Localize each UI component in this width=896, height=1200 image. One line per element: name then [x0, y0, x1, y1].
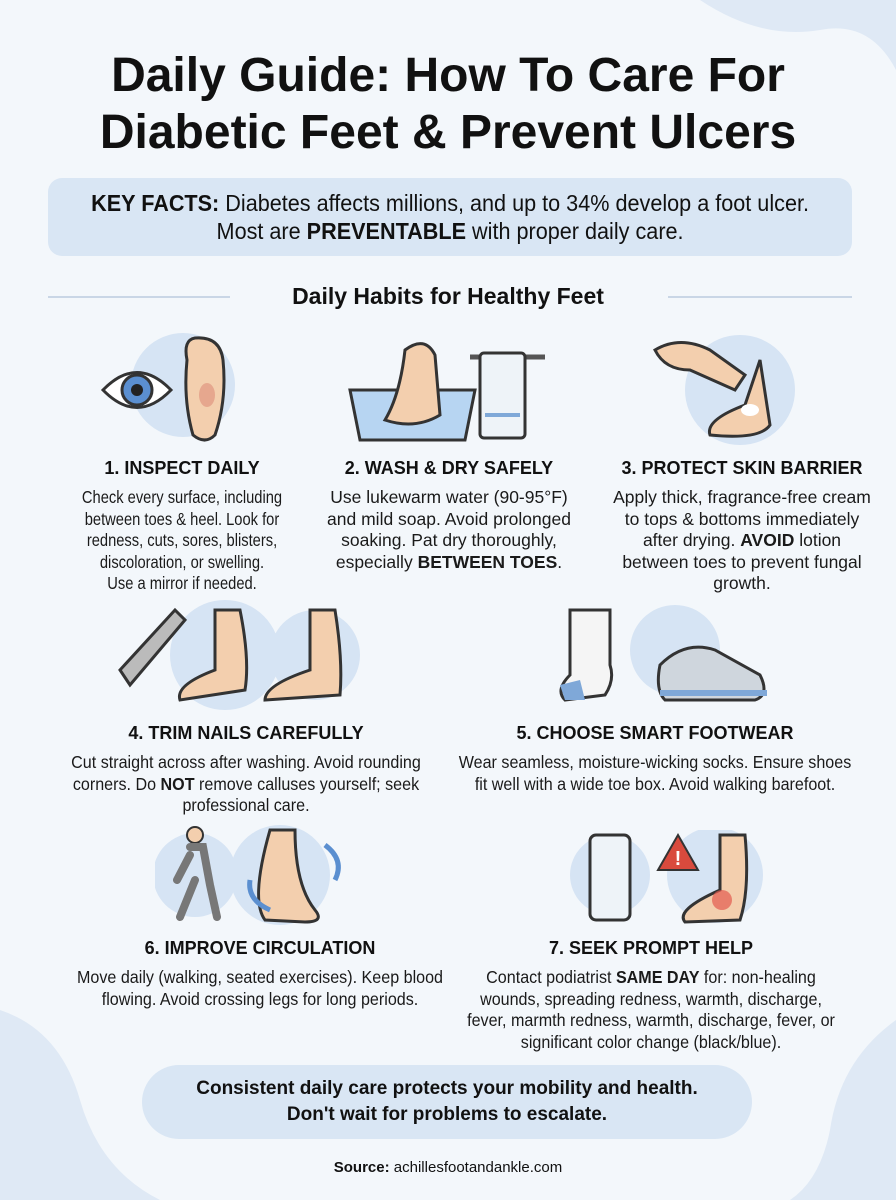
habit 6: Move daily (walking, seated exercises). Keep blood [77, 967, 443, 987]
icon: seek help: ! [675, 848, 681, 870]
habit 1: discoloration, or swelling. [100, 552, 264, 572]
habit 1: Use a mirror if needed. [107, 573, 257, 593]
habit 3: between toes to prevent fungal [622, 552, 862, 572]
habit 6: 6. IMPROVE CIRCULATION [145, 938, 375, 958]
habit 7: 7. SEEK PROMPT HELP [549, 938, 753, 958]
habit 5: Wear seamless, moisture-wicking socks. Ensure shoes [459, 752, 851, 772]
habit 7: wounds, spreading redness, warmth, discharge, [480, 988, 822, 1008]
icon: protect skin [653, 335, 795, 445]
title: Daily Guide: How To Care For [111, 49, 785, 102]
habit 2: soaking. Pat dry thoroughly, [341, 530, 557, 550]
habit 7: significant color change (black/blue). [521, 1032, 781, 1052]
habit 5: fit well with a wide toe box. Avoid walking barefoot. [475, 774, 835, 794]
habit 1: between toes & heel. Look for [85, 508, 279, 528]
habit 7: fever, marmth redness, warmth, discharge, fever, or [467, 1010, 835, 1030]
source: Source: achillesfootandankle.com [334, 1159, 562, 1176]
key facts box [48, 178, 852, 256]
key facts box: Most are PREVENTABLE with proper daily care. [217, 218, 684, 244]
habit 5 [458, 723, 851, 794]
title [100, 49, 796, 159]
icon: inspect [101, 333, 235, 442]
habit 1 [82, 458, 282, 593]
closing banner [142, 1065, 752, 1139]
habit 3: 3. PROTECT SKIN BARRIER [621, 458, 863, 478]
key facts box: KEY FACTS: Diabetes affects millions, and up to 34% develop a foot ulcer. [91, 190, 809, 216]
habit 2: and mild soap. Avoid prolonged [327, 508, 571, 528]
habit 4: 4. TRIM NAILS CAREFULLY [128, 723, 364, 743]
habit 3: to tops & bottoms immediately [625, 508, 859, 528]
habit 1: Check every surface, including [82, 487, 282, 507]
icon: seek help [570, 830, 763, 924]
habit 3: after drying. AVOID lotion [643, 530, 841, 550]
habit 4: professional care. [182, 795, 310, 815]
habit 4 [71, 723, 421, 815]
icon: trim nails [118, 600, 360, 710]
habit 3: growth. [713, 573, 771, 593]
habit 7 [467, 938, 835, 1052]
habit 3: Apply thick, fragrance-free cream [613, 487, 871, 507]
closing banner: Don't wait for problems to escalate. [287, 1104, 607, 1125]
habit 2: especially BETWEEN TOES. [336, 552, 562, 572]
section heading: Daily Habits for Healthy Feet [292, 283, 604, 309]
habit 4: corners. Do NOT remove calluses yourself; seek [73, 774, 419, 794]
habit 2: 2. WASH & DRY SAFELY [345, 458, 553, 478]
title: Diabetic Feet & Prevent Ulcers [100, 106, 796, 159]
icon: wash [348, 342, 545, 442]
closing banner: Consistent daily care protects your mobility and health. [196, 1078, 698, 1099]
habit 6: flowing. Avoid crossing legs for long periods. [102, 988, 418, 1008]
habit 2 [327, 458, 571, 572]
habit 7: Contact podiatrist SAME DAY for: non-healing [486, 967, 816, 987]
habit 1: 1. INSPECT DAILY [104, 458, 260, 478]
habit 5: 5. CHOOSE SMART FOOTWEAR [516, 723, 794, 743]
habit 1: redness, cuts, sores, blisters, [87, 530, 277, 550]
habit 3 [613, 458, 871, 593]
icon: circulation [155, 825, 341, 925]
habit 4: Cut straight across after washing. Avoid rounding [71, 752, 421, 772]
habit 6 [77, 938, 443, 1008]
habit 2: Use lukewarm water (90-95°F) [330, 487, 568, 507]
icon: footwear [559, 605, 767, 702]
